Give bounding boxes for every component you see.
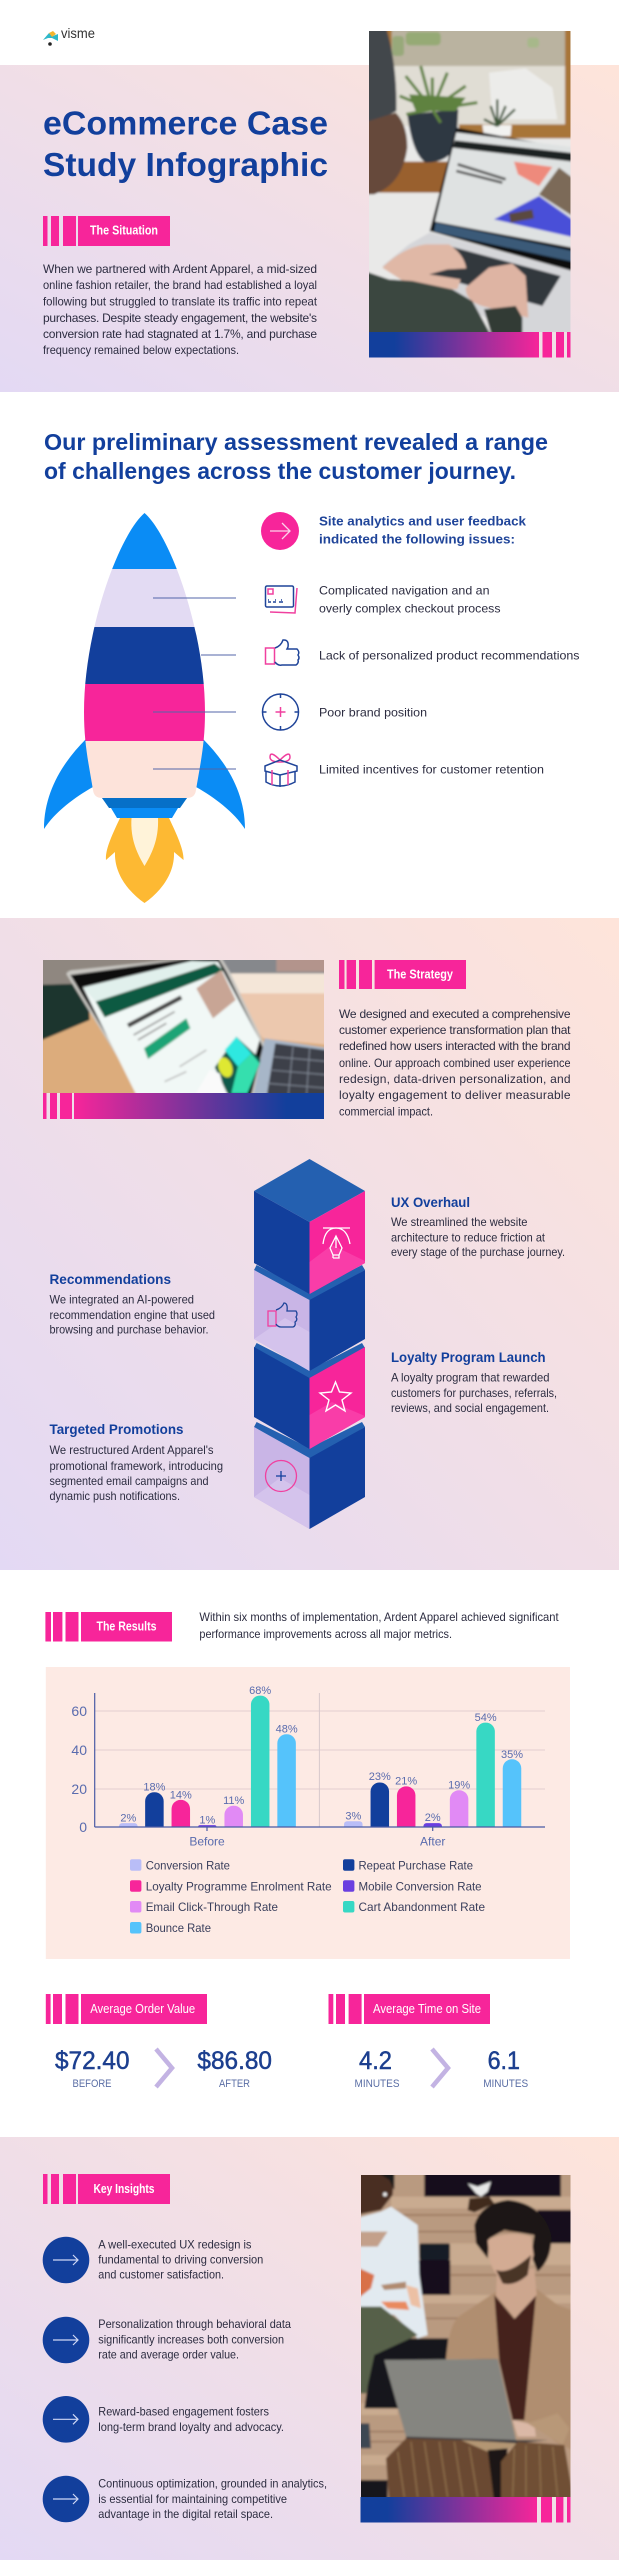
stat: average time on site: 4.2 [359,2047,392,2075]
text: incentives issue: Limited incentives for customer retention [319,762,544,776]
chart legend: Email Click-Through Rate [146,1900,278,1914]
stat: average time on site: MINUTES [483,2078,528,2090]
insight 2 [43,2317,291,2363]
callout: Recommendations [50,1272,215,1336]
callout: Recommendations: We integrated an AI-powered [50,1292,194,1306]
axis labels [71,1703,445,1848]
heading: preliminary assessment: of challenges across the customer journey. [44,458,516,484]
photo: man with laptop on wooden steps [356,2170,576,2503]
callout: Loyalty Program Launch: reviews, and social engagement. [391,1401,549,1415]
intro text: site analytics [319,514,527,546]
text block: situation: conversion rate had stagnated at 1.7%, and purchase [43,327,317,341]
text: personalized recommendations issue: Lack of personalized product recommendations [319,648,580,662]
callout: Recommendations: recommendation engine that used [50,1308,215,1322]
insight 3 [43,2396,284,2443]
stat: average order value: $86.80 [197,2047,272,2075]
insight 3: long-term brand loyalty and advocacy. [98,2420,284,2434]
value labels: 21% [395,1776,417,1788]
value labels: 1% [199,1814,215,1826]
stat: average order value [55,2047,272,2090]
icon: target [262,694,298,730]
callout: Targeted Promotions: Targeted Promotions [50,1422,184,1437]
axis labels: Before [189,1834,225,1848]
stat: average order value: BEFORE [72,2078,112,2090]
text block: strategy: commercial impact. [339,1104,433,1118]
value labels [120,1685,523,1826]
tag: The Strategy [339,960,466,989]
heading: preliminary assessment: Our preliminary assessment revealed a range [44,429,548,455]
logo: visme: visme [61,25,95,41]
callout: Targeted Promotions: promotional framework, introducing [50,1459,223,1473]
text block: situation: When we partnered with Ardent Apparel, a mid-sized [43,262,317,276]
axis labels: 40 [71,1742,87,1758]
callout: Recommendations: browsing and purchase behavior. [50,1322,208,1336]
callout: Loyalty Program Launch: customers for purchases, referrals, [391,1386,557,1400]
tag: Key Insights: Key Insights [94,2182,155,2196]
text: results intro: performance improvements across all major metrics. [199,1627,452,1641]
text block: situation: online fashion retailer, the brand had established a loyal [43,278,317,292]
text: results intro: Within six months of implementation, Ardent Apparel achieved significant [199,1610,559,1624]
bar chart: before and after [71,1685,545,1856]
icon: credit card [266,586,297,613]
text block: strategy: customer experience transformation plan that [339,1023,571,1037]
value labels: 23% [369,1771,391,1783]
chart legend: Conversion Rate [146,1858,230,1872]
axis labels: 0 [79,1819,87,1835]
text block: strategy: redefined how users interacted with the brand [339,1039,570,1053]
text block: strategy: loyalty engagement to deliver measurable [339,1088,571,1102]
insight 4 [43,2476,327,2522]
callout: Loyalty Program Launch [391,1350,557,1415]
gradient bar: situation photo [369,332,570,358]
chart legend: Mobile Conversion Rate [358,1880,482,1894]
tag: Average Order Value [46,1994,207,2024]
icon: pink arrow circle [261,512,299,550]
photo: laptop on wood table [43,960,324,1093]
cube 1: UX overhaul [254,1159,365,1294]
insight 2: significantly increases both conversion [98,2333,284,2347]
tag: The Results [45,1612,172,1642]
title: Study Infographic [43,146,328,183]
tag: Average Order Value: Average Order Value [90,2002,195,2016]
text: navigation issue: Complicated navigation and an [319,584,490,598]
panel: chart background [46,1667,570,1959]
text block: strategy: redesign, data-driven personalization, and [339,1072,570,1086]
value labels: 14% [170,1789,192,1801]
text: results intro [199,1610,559,1641]
callout: UX Overhaul: UX Overhaul [391,1195,470,1210]
value labels: 3% [345,1811,361,1823]
panel: strategy background [0,918,619,1570]
logo: visme [43,25,95,46]
value labels: 18% [143,1782,166,1794]
callout: Targeted Promotions [50,1422,223,1503]
icon: gift box [265,754,297,787]
text block: strategy: We designed and executed a comprehensive [339,1007,571,1021]
chart legend: Loyalty Programme Enrolment Rate [146,1880,332,1894]
text block: situation: purchases. Despite steady engagement, the website's [43,311,317,325]
callout: UX Overhaul: every stage of the purchase journey. [391,1245,565,1259]
rocket illustration [44,510,245,903]
value labels: 2% [120,1813,136,1825]
text block: situation: following but struggled to translate its traffic into repeat [43,294,318,308]
text block: situation: frequency remained below expectations. [43,343,239,357]
text: brand position issue: Poor brand position [319,706,427,720]
insight 1: fundamental to driving conversion [98,2253,263,2267]
isometric cube stack [254,1159,365,1529]
callout: Targeted Promotions: segmented email campaigns and [50,1474,208,1488]
insight 2: rate and average order value. [98,2347,239,2361]
intro text: site analytics: indicated the following issues: [319,532,515,546]
cube 4: targeted promotions [254,1422,365,1529]
value labels: 11% [223,1795,245,1807]
axis labels: After [420,1834,445,1848]
intro text: site analytics: Site analytics and user feedback [319,514,527,528]
cube 2: recommendations [254,1265,365,1371]
callout: UX Overhaul: We streamlined the website [391,1215,528,1229]
stat: average time on site [354,2047,528,2090]
gradient bar: strategy photo [43,1093,324,1119]
tag: Key Insights [43,2174,170,2204]
stat: average order value: $72.40 [55,2047,130,2075]
bars [119,1696,522,1826]
text: navigation issue: overly complex checkout process [319,602,500,616]
cube 3: loyalty [254,1343,365,1449]
text: navigation issue [319,584,500,616]
chart legend: Bounce Rate [146,1921,211,1935]
axis labels: 60 [71,1703,87,1719]
insight 2: Personalization through behavioral data [98,2317,291,2331]
insight 4: advantage in the digital retail space. [98,2507,273,2521]
panel: key insights background [0,2137,619,2560]
axis labels: 20 [71,1781,87,1797]
callout: UX Overhaul: architecture to reduce friction at [391,1230,546,1244]
tag: Average Time on Site: Average Time on Site [373,2002,481,2016]
photo: person using laptop at window [364,26,577,338]
value labels: 19% [448,1780,470,1792]
chart legend [130,1858,485,1935]
chart legend: Repeat Purchase Rate [358,1858,473,1872]
tag: The Situation: The Situation [90,224,158,238]
value labels: 48% [276,1724,298,1736]
value labels: 54% [475,1712,497,1724]
callout: UX Overhaul [391,1195,565,1259]
value labels: 68% [249,1685,271,1697]
insight 3: Reward-based engagement fosters [98,2405,269,2419]
callout: Loyalty Program Launch: A loyalty program that rewarded [391,1370,550,1384]
insight 1 [43,2237,263,2283]
text block: strategy: online. Our approach combined user experience [339,1056,571,1070]
icon: thumbs up [266,640,299,665]
insight 4: Continuous optimization, grounded in analytics, [98,2477,327,2491]
tag: Average Time on Site [328,1994,490,2024]
tag: The Results: The Results [96,1620,157,1634]
insight 1: and customer satisfaction. [98,2268,224,2282]
connector lines [153,598,236,769]
callout: Loyalty Program Launch: Loyalty Program Launch [391,1350,546,1365]
callout: Recommendations: Recommendations [50,1272,171,1287]
stat: average time on site: 6.1 [488,2047,520,2075]
title [43,104,328,183]
tag: The Strategy: The Strategy [387,968,453,982]
heading: preliminary assessment [44,429,548,484]
stat: average order value: AFTER [219,2078,250,2090]
value labels: 2% [425,1812,441,1824]
value labels: 35% [501,1749,523,1761]
text block: situation [43,262,318,357]
callout: Targeted Promotions: We restructured Ardent Apparel's [50,1443,214,1457]
stat: average time on site: MINUTES [354,2078,400,2090]
insight 4: is essential for maintaining competitive [98,2492,287,2506]
panel: situation background [0,65,619,392]
gradient bar: insights photo [360,2497,570,2522]
chart legend: Cart Abandonment Rate [358,1900,485,1914]
tag: The Situation [43,216,170,246]
callout: Targeted Promotions: dynamic push notifications. [50,1489,180,1503]
insight 1: A well-executed UX redesign is [98,2237,252,2251]
text block: strategy [339,1007,571,1118]
title: eCommerce Case [43,104,328,142]
